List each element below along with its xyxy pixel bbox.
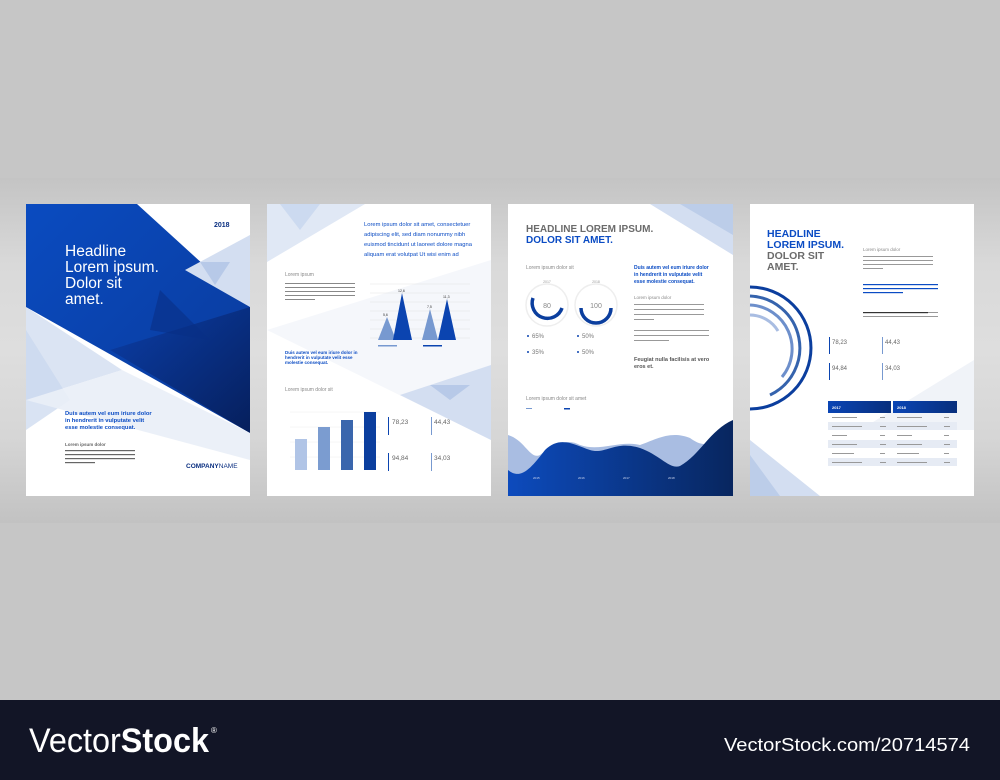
cover small text: Lorem ipsum dolor: [65, 442, 106, 447]
bar chart: [285, 387, 380, 470]
donut charts: 65%: [532, 334, 545, 340]
donut charts: [526, 280, 617, 356]
area chart: Lorem ipsum dolor sit amet: [526, 396, 587, 402]
company name: COMPANYNAME: [186, 463, 238, 470]
headline: LOREM IPSUM.: [767, 239, 844, 251]
table: 2017: [832, 405, 842, 410]
triangle chart: 11,3: [443, 295, 450, 299]
footer bar: VectorStock.com/20714574: [724, 735, 970, 755]
table: 2018: [897, 405, 907, 410]
cover small text: [65, 442, 135, 463]
triangle chart: 7,5: [427, 305, 432, 309]
blue intro text: euismod tincidunt ut laoreet dolore magna: [364, 242, 473, 248]
page 4: [750, 204, 974, 496]
donut charts: 2017: [543, 280, 551, 284]
year: 2018: [214, 222, 230, 229]
triangle chart: 12,6: [398, 289, 405, 293]
cover blue text: [65, 411, 152, 431]
page 1: cover: Lorem ipsum.: [65, 259, 159, 276]
donut charts: 50%: [582, 350, 595, 356]
blue intro text: adipiscing elit, sed diam nonummy nibh: [364, 232, 465, 238]
right text column: [634, 265, 710, 370]
area chart: 2018: [668, 476, 675, 480]
blue intro text: Lorem ipsum dolor sit amet, consectetuer: [364, 222, 470, 228]
right text column: esse molestie consequat.: [634, 279, 695, 285]
donut charts: 2018: [592, 280, 600, 284]
stats: 34,03: [434, 455, 451, 462]
table: [828, 401, 957, 466]
donut charts: 80: [543, 303, 551, 310]
footer bar: ®: [211, 726, 217, 735]
page 3: [508, 204, 733, 496]
donut charts: 35%: [532, 350, 545, 356]
right text column: eros et.: [634, 364, 654, 370]
text block: [285, 272, 355, 300]
stats: 78,23: [392, 419, 409, 426]
headline: AMET.: [767, 261, 799, 273]
blue callout: molestie consequat.: [285, 360, 328, 365]
blue intro text: aliquam erat volutpat Ut wisi enim ad: [364, 252, 459, 258]
donut charts: 100: [590, 303, 602, 310]
cover blue text: Duis autem vel eum iriure dolor: [65, 411, 152, 417]
stats: 44,43: [434, 419, 451, 426]
cover blue text: in hendrerit in vulputate velit: [65, 418, 144, 424]
text: Lorem ipsum dolor: [863, 247, 901, 252]
headline: [767, 228, 844, 273]
stats: [388, 417, 451, 471]
right text column: in hendrerit in vulputate velit: [634, 272, 703, 278]
right text column: Feugiat nulla facilisis at vero: [634, 357, 710, 363]
cover blue text: esse molestie consequat.: [65, 425, 136, 431]
page 3: DOLOR SIT AMET.: [526, 235, 613, 246]
page 2: [267, 204, 491, 496]
text: [863, 247, 938, 317]
area chart: 2016: [578, 476, 585, 480]
triangle chart: 5,6: [383, 313, 388, 317]
headline: HEADLINE LOREM IPSUM.: [526, 224, 653, 235]
bar chart: Lorem ipsum dolor sit: [285, 387, 333, 393]
arcs: [750, 287, 811, 409]
page 3: Lorem ipsum dolor sit: [526, 265, 574, 271]
stats: [829, 337, 901, 380]
area chart: 2017: [623, 476, 630, 480]
right text column: Lorem ipsum dolor: [634, 295, 672, 300]
right text column: Duis autem vel eum iriure dolor: [634, 265, 709, 271]
blue callout: [285, 350, 358, 365]
page 1: cover: Dolor sit: [65, 275, 123, 292]
stats: 44,43: [885, 340, 901, 346]
cover headline: Headline: [65, 243, 126, 260]
headline: HEADLINE: [767, 228, 821, 240]
page 1: cover: [26, 204, 250, 496]
triangle chart: [370, 284, 470, 346]
area chart: [508, 396, 733, 496]
footer bar: [0, 700, 1000, 780]
area chart: 2015: [533, 476, 540, 480]
text block: Lorem ipsum: [285, 272, 314, 278]
footer bar: VectorStock: [29, 722, 209, 760]
blue callout: Duis autem vel eum iriure dolor in: [285, 350, 358, 355]
blue intro text: [364, 222, 473, 258]
stats: 94,84: [392, 455, 409, 462]
donut charts: 50%: [582, 334, 595, 340]
headline: DOLOR SIT: [767, 250, 825, 262]
stats: 78,23: [832, 340, 848, 346]
blue callout: hendrerit in vulputate velit esse: [285, 355, 353, 360]
page 1: cover: amet.: [65, 291, 104, 308]
stats: 34,03: [885, 366, 901, 372]
stats: 94,84: [832, 366, 848, 372]
